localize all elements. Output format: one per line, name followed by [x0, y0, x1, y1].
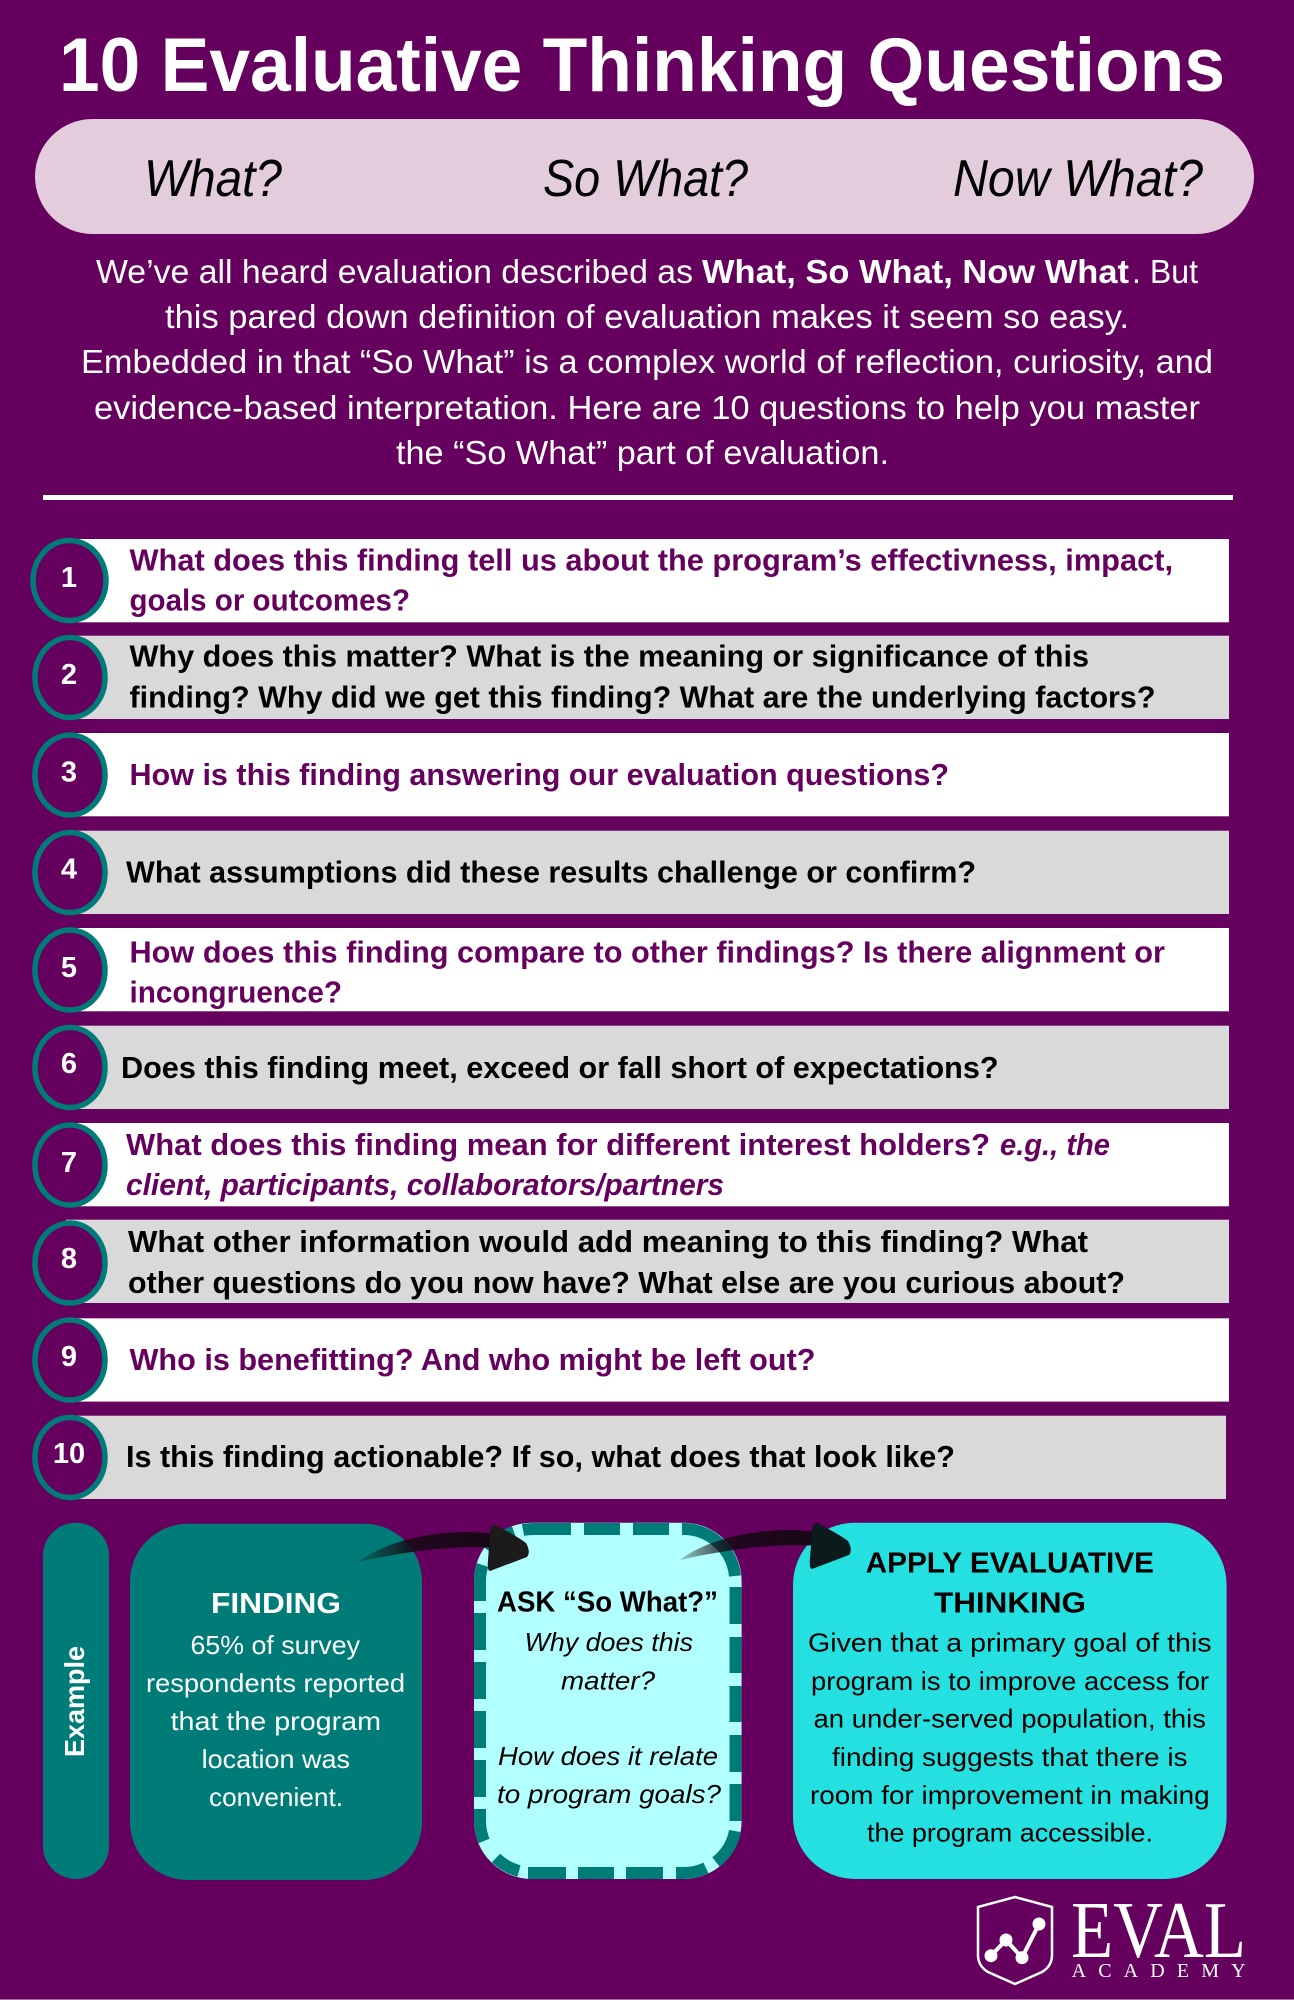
arrow: ask to apply	[680, 1523, 851, 1569]
question 3: 3	[61, 757, 77, 789]
intro paragraph: this pared down definition of evaluation makes it seem so easy.	[165, 299, 1129, 336]
question 1	[33, 539, 1229, 622]
intro paragraph: What, So What, Now What	[702, 254, 1129, 291]
apply body text: an under-served population, this	[814, 1704, 1206, 1734]
question 4	[35, 831, 1229, 914]
question 6: Does this finding meet, exceed or fall short of expectations?	[121, 1051, 999, 1085]
question 7: 7	[61, 1147, 77, 1179]
question 2: Why does this matter? What is the meaning or significance of this	[130, 640, 1089, 674]
apply body text	[808, 1628, 1212, 1848]
question 7: e.g., the	[1000, 1128, 1110, 1162]
label: So What?: So What?	[543, 150, 748, 208]
ask body text: matter?	[561, 1666, 656, 1696]
finding body text	[146, 1630, 405, 1812]
label: What?: What?	[144, 150, 282, 208]
label: Now What?: Now What?	[953, 150, 1203, 208]
apply body text: the program accessible.	[867, 1818, 1153, 1848]
question 8	[35, 1220, 1229, 1303]
apply body text: room for improvement in making	[810, 1780, 1210, 1810]
question 1: goals or outcomes?	[130, 584, 410, 618]
intro paragraph: Embedded in that “So What” is a complex world of reflection, curiosity, and	[81, 344, 1213, 381]
intro paragraph: We’ve all heard evaluation described as	[96, 254, 693, 291]
question 6: 6	[61, 1048, 77, 1080]
finding body text: that the program	[171, 1706, 381, 1736]
question 3: How is this finding answering our evaluation questions?	[130, 758, 949, 792]
logo: eval academy	[978, 1885, 1246, 1984]
panel: ask so what	[474, 1523, 742, 1879]
question 7	[35, 1123, 1229, 1206]
finding body text: convenient.	[209, 1782, 343, 1812]
question 10	[35, 1416, 1226, 1499]
panel: example side label: Example	[59, 1646, 90, 1757]
finding heading: FINDING	[211, 1588, 341, 1620]
ask body text	[497, 1627, 722, 1809]
question 9: 9	[61, 1341, 77, 1373]
panel: apply evaluative thinking	[793, 1523, 1227, 1879]
finding body text: 65% of survey	[190, 1630, 360, 1660]
title: 10 Evaluative Thinking Questions	[59, 23, 1225, 108]
panel: finding	[130, 1524, 422, 1880]
apply heading	[866, 1548, 1154, 1620]
question 9: Who is benefitting? And who might be left out?	[130, 1343, 816, 1377]
question 10: 10	[53, 1438, 85, 1470]
ask heading: ASK “So What?”	[497, 1587, 718, 1619]
question 2	[35, 636, 1229, 719]
question 6	[35, 1026, 1229, 1109]
ask body text: Why does this	[524, 1627, 693, 1657]
question 5: incongruence?	[130, 976, 342, 1010]
question 1: What does this finding tell us about the program’s effectivness, impact,	[130, 544, 1173, 578]
question 3	[35, 733, 1229, 816]
question 9	[35, 1318, 1229, 1402]
question 2: finding? Why did we get this finding? What are the underlying factors?	[130, 681, 1156, 715]
intro paragraph: the “So What” part of evaluation.	[396, 435, 889, 472]
ask body text: to program goals?	[497, 1779, 722, 1809]
question 4: 4	[61, 854, 77, 886]
question 5: How does this finding compare to other findings? Is there alignment or	[130, 936, 1165, 970]
apply body text: finding suggests that there is	[832, 1742, 1188, 1772]
question 2: 2	[61, 659, 77, 691]
question 7: client, participants, collaborators/partners	[126, 1168, 724, 1202]
ask body text: How does it relate	[498, 1741, 718, 1771]
intro paragraph: . But	[1132, 254, 1199, 291]
icon: shield with line chart	[978, 1897, 1052, 1984]
logo wordmark: EVAL	[1071, 1885, 1246, 1975]
question 10: Is this finding actionable? If so, what does that look like?	[126, 1440, 955, 1474]
question 4: What assumptions did these results challenge or confirm?	[126, 856, 976, 890]
logo subtitle: ACADEMY	[1072, 1960, 1246, 1982]
intro paragraph	[81, 254, 1213, 472]
apply heading: APPLY EVALUATIVE	[866, 1548, 1154, 1580]
apply body text: Given that a primary goal of this	[808, 1628, 1212, 1658]
apply heading: THINKING	[934, 1588, 1086, 1620]
question 8: other questions do you now have? What else are you curious about?	[128, 1266, 1125, 1300]
question 8: What other information would add meaning to this finding? What	[128, 1225, 1088, 1259]
panel: what, so what, now what pill	[35, 119, 1254, 234]
question 5: 5	[61, 952, 77, 984]
apply body text: program is to improve access for	[811, 1666, 1209, 1696]
arrow: finding to ask	[358, 1525, 529, 1571]
finding body text: respondents reported	[146, 1668, 405, 1698]
question 5	[35, 928, 1229, 1011]
panel: example side label	[43, 1523, 109, 1879]
question 8: 8	[61, 1243, 77, 1275]
intro paragraph: evidence-based interpretation. Here are 10 questions to help you master	[94, 390, 1200, 427]
finding body text: location was	[202, 1744, 350, 1774]
question 7: What does this finding mean for different interest holders?	[126, 1128, 990, 1162]
question 1: 1	[61, 562, 77, 594]
